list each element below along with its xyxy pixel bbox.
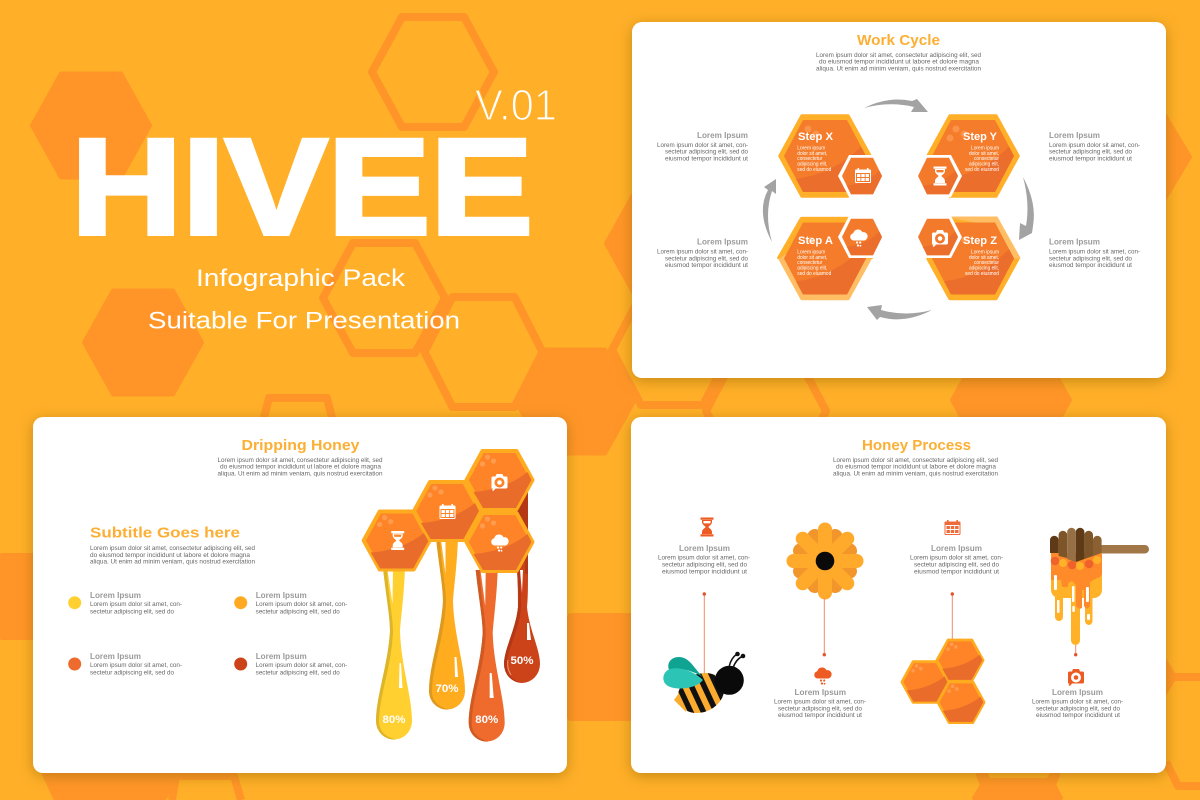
step A hexagon: Step A	[798, 235, 833, 247]
text block: step two	[774, 688, 866, 719]
intro text: do eiusmod tempor incididunt ut labore et dolore magna	[819, 59, 980, 66]
step X hexagon	[780, 116, 886, 197]
version label: V.01	[475, 81, 557, 130]
drip: 80% orange	[469, 570, 505, 742]
legend item: orange: Lorem Ipsum	[90, 652, 141, 661]
icon: honey dipper	[1050, 528, 1149, 645]
intro text	[816, 52, 981, 72]
text block: step one: Lorem Ipsum	[679, 544, 730, 553]
text block: step three: sectetur adipiscing elit, sed do	[914, 562, 1000, 569]
subtitle body text: Lorem ipsum dolor sit amet, consectetur adipiscing elit, sed	[90, 545, 255, 552]
legend item: orange: Lorem ipsum dolor sit amet, con-	[90, 662, 182, 669]
honeycomb cell: cloud	[466, 513, 532, 571]
arrow: right	[1019, 177, 1034, 240]
legend item: red	[234, 652, 347, 676]
callout: top right: sectetur adipiscing elit, sed do	[1049, 149, 1133, 156]
text block: step two: Lorem Ipsum	[794, 688, 846, 697]
callout: bottom left: Lorem Ipsum	[697, 238, 748, 247]
step X hexagon: Step X	[798, 131, 834, 143]
step Y hexagon: Lorem ipsum	[971, 146, 999, 152]
text block: step one: Lorem ipsum dolor sit amet, con-	[658, 554, 750, 561]
text block: step three: eiusmod tempor incididunt ut	[914, 568, 999, 575]
callout: bottom left: Lorem ipsum dolor sit amet, con-	[657, 249, 748, 256]
arrow: left	[763, 179, 776, 242]
step A hexagon	[778, 216, 886, 298]
callout: top left: eiusmod tempor incididunt ut	[665, 155, 748, 162]
subtitle body text: aliqua. Ut enim ad minim veniam, quis nostrud exercitation	[90, 559, 255, 566]
legend item: red: Lorem Ipsum	[256, 652, 307, 661]
text block: step four: eiusmod tempor incididunt ut	[1036, 712, 1120, 719]
step Z hexagon: sed do eiusmod	[965, 271, 999, 277]
connector: dipper	[1074, 645, 1077, 656]
panel: dripping honey	[33, 417, 567, 773]
icon: flower	[786, 522, 864, 600]
honeycomb cell: calendar	[414, 482, 480, 540]
drip: 80% yellow: 80%	[382, 714, 406, 726]
text block: step three	[910, 544, 1003, 575]
legend item: red: sectetur adipiscing elit, sed do	[256, 669, 340, 676]
legend item: yellow: Lorem ipsum dolor sit amet, con-	[90, 601, 182, 608]
step X hexagon: adipiscing elit,	[797, 162, 827, 168]
step Z hexagon: adipiscing elit,	[969, 266, 999, 272]
step A hexagon: Lorem ipsum	[797, 250, 825, 256]
step Y hexagon: adipiscing elit,	[969, 162, 999, 168]
heading: dripping honey: Dripping Honey	[242, 438, 360, 454]
step X hexagon: Lorem ipsum	[797, 146, 825, 152]
step Z hexagon	[914, 216, 1020, 298]
icon: camera	[1068, 669, 1084, 686]
step A hexagon: sed do eiusmod	[797, 271, 831, 277]
text block: step four: Lorem ipsum dolor sit amet, con-	[1032, 699, 1123, 706]
text block: step one	[658, 544, 750, 575]
callout: bottom right: eiusmod tempor incididunt ut	[1049, 262, 1132, 269]
intro text: Lorem ipsum dolor sit amet, consectetur adipiscing elit, sed	[816, 52, 981, 59]
callout: top left: Lorem Ipsum	[697, 131, 748, 140]
subtitle: Subtitle Goes here	[90, 524, 240, 542]
connector: flower	[823, 598, 826, 656]
legend item: amber: Lorem Ipsum	[256, 591, 307, 600]
step A hexagon: adipiscing elit,	[797, 266, 827, 272]
callout: bottom right: Lorem ipsum dolor sit amet, con-	[1049, 249, 1140, 256]
drip: 70% amber: 70%	[436, 683, 459, 695]
legend item: red: Lorem ipsum dolor sit amet, con-	[256, 662, 347, 669]
drip: 80% orange: 80%	[475, 714, 498, 726]
callout: top left: sectetur adipiscing elit, sed do	[665, 149, 749, 156]
step Z hexagon: dolor sit amet,	[969, 255, 999, 261]
callout: bottom left	[657, 238, 749, 269]
step Y hexagon: Step Y	[963, 131, 998, 143]
icon: calendar	[944, 520, 960, 535]
subtitle body text: do eiusmod tempor incididunt ut labore et dolore magna	[90, 552, 251, 559]
legend item: yellow	[68, 591, 182, 615]
arrow: top	[864, 99, 928, 112]
legend item: amber: sectetur adipiscing elit, sed do	[256, 608, 340, 615]
arrow: bottom	[867, 305, 932, 320]
step X hexagon: sed do eiusmod	[797, 167, 831, 173]
callout: top left: Lorem ipsum dolor sit amet, con-	[657, 142, 748, 149]
drip: 70% amber	[429, 538, 465, 710]
step Z hexagon: Step Z	[963, 235, 997, 247]
callout: top right: Lorem Ipsum	[1049, 131, 1100, 140]
legend item: amber: Lorem ipsum dolor sit amet, con-	[256, 601, 347, 608]
icon: cloud	[814, 667, 832, 685]
callout: top right: eiusmod tempor incididunt ut	[1049, 155, 1132, 162]
connector: honeycomb	[951, 592, 954, 642]
intro text: aliqua. Ut enim ad minim veniam, quis nostrud exercitation	[816, 65, 981, 72]
legend item: orange: sectetur adipiscing elit, sed do	[90, 669, 175, 676]
step A hexagon: consectetur	[797, 260, 823, 266]
heading: work cycle: Work Cycle	[857, 33, 940, 49]
subtitle: suitable for presentation: Suitable For Presentation	[148, 308, 460, 334]
text block: step three: Lorem ipsum dolor sit amet, con-	[910, 554, 1003, 561]
callout: bottom right: sectetur adipiscing elit, sed do	[1049, 255, 1133, 262]
heading: honey process: Honey Process	[862, 438, 971, 454]
legend item: yellow: sectetur adipiscing elit, sed do	[90, 608, 175, 615]
drip: 50% red	[504, 489, 540, 683]
step Z hexagon: Lorem ipsum	[971, 250, 999, 256]
step Y hexagon	[914, 116, 1018, 197]
text block: step three: Lorem Ipsum	[931, 544, 982, 553]
intro text	[218, 457, 382, 477]
panel: honey process	[631, 417, 1166, 773]
text block: step two: eiusmod tempor incididunt ut	[778, 712, 862, 719]
drip: 80% yellow	[376, 568, 412, 740]
step Y hexagon: consectetur	[974, 156, 999, 162]
honeycomb cell: hourglass	[364, 512, 430, 570]
intro text: aliqua. Ut enim ad minim veniam, quis nostrud exercitation	[218, 470, 382, 477]
honeycomb cell: camera	[466, 451, 532, 509]
connector: bee	[703, 592, 706, 680]
text block: step four: Lorem Ipsum	[1052, 688, 1103, 697]
legend item: amber	[234, 591, 347, 615]
callout: top right: Lorem ipsum dolor sit amet, con-	[1049, 142, 1140, 149]
step A hexagon: dolor sit amet,	[797, 255, 827, 261]
text block: step two: Lorem ipsum dolor sit amet, con-	[774, 699, 866, 706]
callout: bottom left: eiusmod tempor incididunt ut	[665, 262, 748, 269]
text block: step four	[1032, 688, 1123, 719]
intro text	[833, 457, 998, 477]
icon: hourglass	[700, 518, 714, 536]
intro text: do eiusmod tempor incididunt ut labore et dolore magna	[836, 464, 997, 471]
legend item: orange	[68, 652, 182, 676]
step Z hexagon: consectetur	[974, 260, 999, 266]
text block: step two: sectetur adipiscing elit, sed do	[778, 705, 863, 712]
intro text: do eiusmod tempor incididunt ut labore et dolore magna	[220, 464, 382, 471]
panel: work cycle	[632, 22, 1166, 378]
callout: top right	[1049, 131, 1140, 162]
text block: step one: sectetur adipiscing elit, sed do	[662, 562, 748, 569]
callout: bottom right	[1049, 238, 1140, 269]
step Y hexagon: sed do eiusmod	[965, 167, 999, 173]
intro text: aliqua. Ut enim ad minim veniam, quis nostrud exercitation	[833, 470, 998, 477]
callout: bottom right: Lorem Ipsum	[1049, 238, 1100, 247]
step X hexagon: consectetur	[797, 156, 823, 162]
step X hexagon: dolor sit amet,	[797, 151, 827, 157]
callout: top left	[657, 131, 749, 162]
step Y hexagon: dolor sit amet,	[969, 151, 999, 157]
icon: honeycomb	[902, 640, 984, 723]
text block: step four: sectetur adipiscing elit, sed do	[1036, 705, 1121, 712]
text block: step one: eiusmod tempor incididunt ut	[662, 568, 747, 575]
callout: bottom left: sectetur adipiscing elit, sed do	[665, 255, 749, 262]
drip: 50% red: 50%	[510, 655, 534, 667]
main title HIVEE: HIVEE	[71, 111, 533, 264]
subtitle body text	[90, 545, 255, 566]
legend item: yellow: Lorem Ipsum	[90, 591, 141, 600]
subtitle: infographic pack: Infographic Pack	[196, 265, 406, 292]
intro text: Lorem ipsum dolor sit amet, consectetur adipiscing elit, sed	[218, 457, 382, 464]
intro text: Lorem ipsum dolor sit amet, consectetur adipiscing elit, sed	[833, 457, 998, 464]
icon: bee	[663, 652, 746, 713]
